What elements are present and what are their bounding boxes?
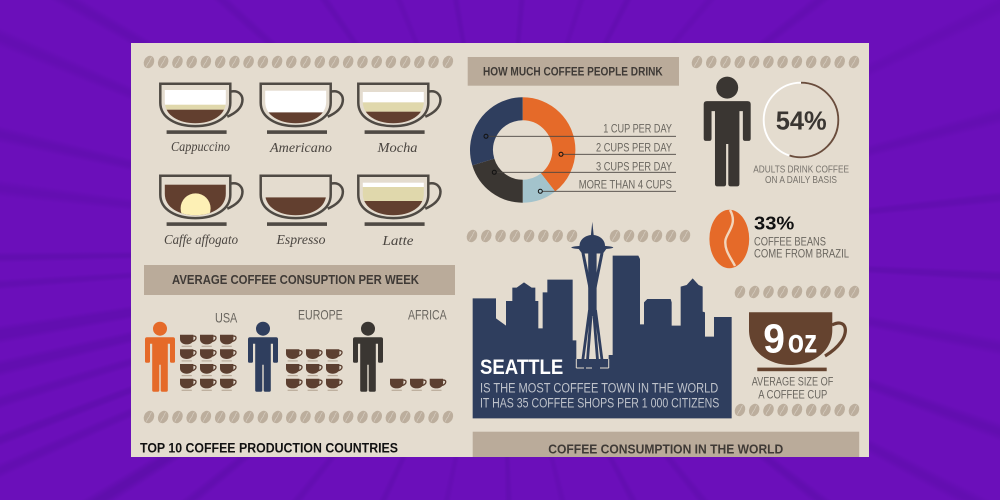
city description: IT HAS 35 COFFEE SHOPS PER 1 000 CITIZENS (480, 396, 719, 411)
icon: USA person (145, 322, 175, 392)
icon: orange coffee bean (709, 210, 749, 268)
heading: average coffee consumption: AVERAGE COFFEE CONSUPTION PER WEEK (172, 273, 419, 287)
heading: average coffee consumption (144, 265, 455, 295)
USA cups (180, 335, 236, 391)
city description (480, 380, 719, 411)
heading: top 10 production countries: TOP 10 COFFEE PRODUCTION COUNTRIES (140, 440, 398, 455)
icon: space needle (571, 222, 613, 368)
icon: large person (704, 77, 751, 186)
bean row: below 9oz cup (733, 402, 861, 418)
city description: IS THE MOST COFFEE TOWN IN THE WORLD (480, 380, 719, 395)
label: americano: Americano (269, 140, 332, 155)
stat: 54% adults (704, 77, 849, 186)
caption: adults: ADULTS DRINK COFFEE (753, 164, 849, 175)
value: 33%: 33% (754, 213, 794, 233)
progress ring (764, 83, 838, 157)
bean row: middle (465, 228, 692, 244)
label: USA: USA (215, 310, 238, 326)
cup: caffe affogato (159, 176, 242, 226)
heading: how much coffee people drink: HOW MUCH COFFEE PEOPLE DRINK (483, 66, 663, 78)
cup: latte (357, 176, 440, 226)
heading: how much coffee people drink (468, 57, 679, 86)
caption: adults (753, 164, 849, 186)
heading: coffee consumption in the world (473, 432, 859, 457)
label: mocha: Mocha (376, 140, 418, 155)
bean row: lower left (142, 409, 455, 425)
value: 9oz (763, 315, 817, 361)
label: more than 4 cups: MORE THAN 4 CUPS (579, 177, 672, 191)
caption: adults: ON A DAILY BASIS (765, 175, 837, 186)
heading: coffee consumption in the world: COFFEE CONSUMPTION IN THE WORLD (548, 442, 783, 456)
caption: cup size: A COFFEE CUP (758, 389, 828, 401)
cup: espresso (260, 176, 343, 226)
infographic (131, 43, 869, 457)
label: caffe affogato: Caffe affogato (164, 232, 238, 247)
Africa cups (390, 379, 446, 391)
bean row: above 9oz cup (733, 284, 861, 300)
stat: 9oz cup (749, 312, 845, 401)
cup: cappuccino (159, 84, 242, 134)
value: 9oz: oz (788, 322, 817, 359)
cup: mocha (357, 84, 440, 134)
label: 3 cups: 3 CUPS PER DAY (596, 159, 672, 173)
label: espresso: Espresso (275, 232, 326, 247)
caption: beans: COFFEE BEANS (754, 235, 826, 249)
value: 9oz: 9 (763, 315, 785, 361)
donut segments (465, 92, 581, 208)
stat: 33% beans (709, 210, 849, 268)
icon: Europe person (248, 322, 278, 392)
label: 2 cups: 2 CUPS PER DAY (596, 141, 672, 155)
value: 54%: 54% (776, 105, 827, 135)
label: 1 cup: 1 CUP PER DAY (603, 122, 672, 136)
bean row: top left (142, 54, 455, 70)
label: latte: Latte (381, 233, 414, 248)
chart: donut of daily cups (465, 92, 676, 208)
caption: beans (754, 235, 849, 260)
caption: cup size (752, 376, 833, 401)
chart: weekly consumption by region (145, 307, 447, 392)
label: cappuccino: Cappuccino (171, 139, 230, 154)
panel: cream card (131, 43, 869, 457)
caption: beans: COME FROM BRAZIL (754, 246, 849, 260)
label: Africa: AFRICA (408, 307, 447, 323)
skyline silhouette (473, 256, 732, 418)
panel: Seattle skyline (473, 222, 732, 418)
cup: americano (260, 84, 343, 134)
caption: cup size: AVERAGE SIZE OF (752, 376, 833, 388)
city name: SEATTLE (480, 356, 563, 379)
icon: Africa person (353, 322, 383, 392)
leader lines and dots (484, 134, 676, 193)
label: Europe: EUROPE (298, 307, 343, 323)
coffee cups grid (159, 84, 440, 248)
Europe cups (286, 349, 342, 391)
icon: large brown cup (749, 312, 845, 371)
bean row: top right (690, 54, 861, 70)
